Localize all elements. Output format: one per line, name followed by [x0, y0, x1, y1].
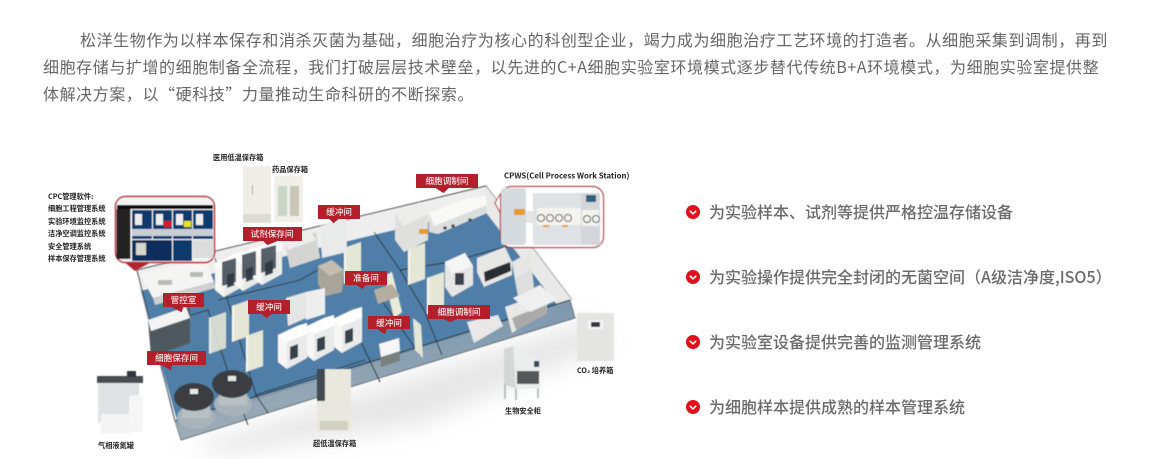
caption: CPWS: CPWS(Cell Process Work Station)	[504, 170, 629, 182]
caption: liquid nitrogen tank: 气相液氮罐	[98, 441, 134, 451]
label: cell preparation room lower	[428, 306, 490, 322]
feature item 3: 为实验室设备提供完善的监测管理系统	[709, 329, 981, 353]
label: cell preparation room lower: 细胞调制间	[438, 306, 480, 318]
callout: CPWS workstation	[495, 186, 604, 248]
label: reagent storage room: 试剂保存间	[251, 228, 293, 240]
control room bench	[140, 258, 214, 298]
CPC software list: 样本保存管理系统	[48, 254, 106, 264]
label: buffer room upper: 缓冲间	[326, 206, 352, 218]
CPC software list	[48, 192, 106, 264]
caption: CO2 incubator: CO₂ 培养箱	[577, 366, 613, 376]
biosafety hoods front	[505, 292, 547, 333]
label: buffer room upper	[318, 206, 360, 222]
back wall	[137, 186, 490, 291]
product: ultra low temperature freezer	[317, 369, 351, 431]
back biosafety hood	[477, 247, 512, 287]
product: pharmaceutical refrigerator	[274, 176, 303, 222]
CPC software list: CPC管理软件:	[48, 192, 93, 202]
cell storage tanks	[174, 370, 252, 429]
laboratory floor plan diagram	[48, 153, 629, 458]
label: reagent storage room	[244, 228, 302, 244]
partitions	[150, 232, 530, 425]
callout: monitoring software screen	[116, 196, 214, 271]
small front cabinet	[379, 338, 400, 367]
middle back cabinets	[286, 292, 306, 326]
door panels	[232, 300, 249, 342]
icon: red chevron bullet	[686, 400, 700, 414]
label: buffer room middle	[248, 300, 290, 318]
product: CO2 incubator	[577, 313, 614, 361]
label: preparation room	[346, 272, 386, 288]
prep room carts	[318, 260, 344, 296]
front glass wall	[175, 300, 575, 440]
building model	[137, 186, 575, 440]
feature item 2: 为实验操作提供完全封闭的无菌空间（A级洁净度,ISO5）	[709, 264, 1112, 288]
intro paragraph: 体解决方案，以“硬科技”力量推动生命科研的不断探索。	[43, 81, 474, 105]
intro paragraph: 细胞存储与扩增的细胞制备全流程，我们打破层层技术壁垒，以先进的C+A细胞实验室环境模式逐步替代传统B+A环境模式，为细胞实验室提供整	[43, 54, 1099, 78]
label: buffer room middle: 缓冲间	[256, 301, 282, 313]
right side units	[513, 285, 557, 312]
isolator hood back	[429, 195, 487, 234]
left wall	[137, 272, 181, 440]
product: biosafety cabinet	[504, 346, 540, 400]
intro paragraph	[43, 27, 1108, 105]
label: cell preparation room upper	[416, 174, 478, 192]
CPC software list: 实验环境监控系统	[48, 217, 106, 227]
reagent storage cabinets	[215, 251, 244, 297]
icon: red chevron bullet	[686, 270, 700, 284]
floor	[140, 206, 562, 424]
building ground shadow	[190, 320, 610, 455]
icon: red chevron bullet	[686, 205, 700, 219]
CPC software list: 细胞工程管理系统	[48, 204, 106, 214]
label: buffer room lower	[368, 316, 410, 334]
label: cell preparation room upper: 细胞调制间	[426, 175, 468, 187]
caption: drug storage: 药品保存箱	[272, 165, 308, 175]
incubator cabinet back	[445, 253, 473, 297]
three middle cabinets	[333, 307, 362, 353]
caption: biosafety cabinet: 生物安全柜	[505, 406, 541, 416]
isolator cabinet back	[395, 202, 428, 252]
caption: medical freezer: 医用低温保存箱	[213, 153, 263, 163]
tall buffer cabinet	[320, 218, 347, 258]
caption: ULT freezer: 超低温保存箱	[313, 439, 356, 449]
icon: red chevron bullet	[686, 335, 700, 349]
product: medical low temperature freezer	[243, 166, 271, 223]
front workbench	[467, 315, 503, 343]
right wall	[481, 186, 572, 306]
reagent hood	[285, 232, 320, 268]
feature item 4: 为细胞样本提供成熟的样本管理系统	[709, 394, 965, 418]
intro paragraph: 松洋生物作为以样本保存和消杀灭菌为基础，细胞治疗为核心的科创型企业，竭力成为细胞治疗工艺环境的打造者。从细胞采集到调制，再到	[80, 27, 1108, 51]
label: cell storage room	[148, 352, 206, 370]
label: cell storage room: 细胞保存间	[155, 352, 198, 364]
feature item 1: 为实验样本、试剂等提供严格控温存储设备	[709, 199, 1013, 223]
label: control room: 管控室	[171, 294, 197, 306]
product: vapor phase liquid nitrogen tank	[97, 371, 143, 434]
CPC software list: 洁净空调监控系统	[48, 229, 106, 239]
label: control room	[164, 294, 204, 312]
label: buffer room lower: 缓冲间	[376, 317, 402, 329]
label: preparation room: 准备间	[353, 272, 379, 284]
control room cabinets	[148, 307, 190, 357]
CPC software list: 安全管理系统	[48, 242, 91, 252]
